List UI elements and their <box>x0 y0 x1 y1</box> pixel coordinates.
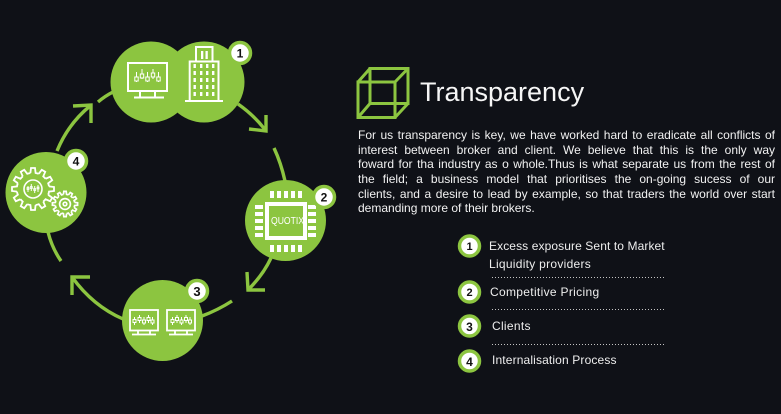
badge 1: 1 <box>237 46 244 60</box>
list badge 4: 4 <box>466 355 473 369</box>
icon: small gear <box>52 191 78 217</box>
list item 4: Internalisation Process <box>492 353 617 367</box>
connector into step 3 <box>202 301 232 316</box>
list item 3: Clients <box>492 319 531 333</box>
badge 4: 4 <box>73 154 80 168</box>
step 4: gears <box>6 150 86 233</box>
icon: processor chip: QUOTIX <box>271 216 304 227</box>
list badge 1: 1 <box>466 241 473 253</box>
connector into step 2 <box>274 148 285 181</box>
list item 1: Excess exposure Sent to Market <box>489 239 665 253</box>
body paragraph: For us transparency is key, we have worked hard to eradicate all conflicts of <box>358 128 775 142</box>
arrow: step 4 to step 1 <box>57 105 91 151</box>
icon: office building <box>185 47 223 101</box>
list item 1: Liquidity providers <box>489 257 591 271</box>
list badges <box>460 236 480 371</box>
arrow: step 1 to step 2 <box>238 104 266 131</box>
body paragraph: demanding more of their brokers. <box>358 201 535 215</box>
body paragraph <box>358 128 775 215</box>
icon: right monitor <box>167 310 195 334</box>
connector into step 1 <box>98 92 113 102</box>
step 2: Quotix chip <box>245 180 334 261</box>
step 1: market and building <box>110 42 250 122</box>
arrow: step 3 to step 4 <box>72 277 123 319</box>
body paragraph: clients, and a desire to lead by example, so that traders the world over start <box>358 187 775 201</box>
list item 1 <box>489 239 665 271</box>
body paragraph: interest between broker and client. We believe that this is the only way <box>358 143 775 157</box>
icon: wireframe cube <box>358 68 408 118</box>
icon: monitor with candlesticks <box>128 63 167 98</box>
list badge 2: 2 <box>466 287 473 299</box>
body paragraph: foward for tha industry as o whole.Thus is what separate us from the rest of <box>358 157 775 171</box>
arrow: step 2 to step 3 <box>247 258 271 290</box>
list item 2: Competitive Pricing <box>490 285 599 299</box>
body paragraph: the field; a business model that prioritises the on-going sucess of our <box>358 172 775 186</box>
badge 2: 2 <box>321 190 328 204</box>
badge 3: 3 <box>193 284 201 299</box>
list badge 3: 3 <box>466 320 473 334</box>
connector into step 4 <box>48 232 61 261</box>
icon: large gear <box>12 168 54 210</box>
title: Transparency <box>420 77 584 107</box>
step 3: two monitors <box>122 280 208 361</box>
icon: left monitor <box>130 310 158 334</box>
